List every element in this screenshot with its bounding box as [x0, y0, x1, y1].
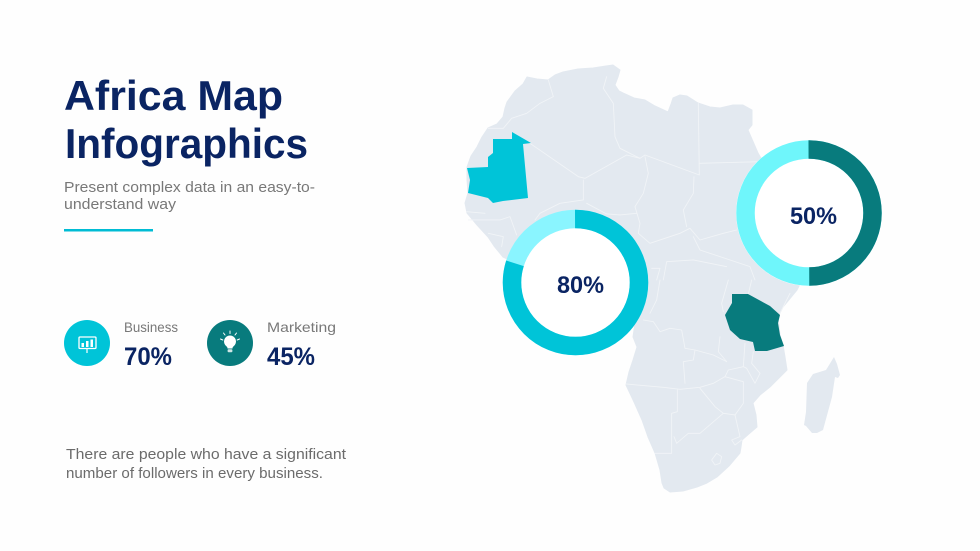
- body text: There are people who have a significant: [66, 446, 347, 463]
- label: marketing: Marketing: [267, 319, 336, 335]
- map: madagascar: [804, 357, 840, 433]
- value: 45%: 45%: [267, 343, 315, 371]
- icon: light bulb: [207, 320, 253, 366]
- africa map: [465, 65, 850, 492]
- subtitle: Present complex data in an easy-to-: [64, 179, 315, 196]
- value: 70%: 70%: [124, 343, 172, 371]
- map: continent outline: [465, 65, 850, 492]
- value: 50%: 50%: [790, 203, 837, 230]
- body text: [66, 446, 347, 482]
- subtitle: understand way: [64, 196, 177, 213]
- map: mauritania highlight: [467, 132, 531, 203]
- icon: presentation board: [64, 320, 110, 366]
- title: Infographics: [65, 120, 308, 167]
- subtitle: [64, 179, 315, 213]
- value: 80%: 80%: [557, 272, 604, 299]
- stat: business: [64, 319, 178, 371]
- stat: marketing: [207, 319, 336, 371]
- accent underline: [64, 229, 153, 232]
- body text: number of followers in every business.: [66, 465, 323, 482]
- title: Africa Map: [64, 72, 283, 119]
- label: business: Business: [124, 319, 178, 335]
- map: northern borders: [467, 77, 760, 280]
- donut chart: 50%: [736, 140, 882, 286]
- title: [64, 72, 308, 167]
- map: tanzania highlight: [725, 294, 784, 351]
- map: southern borders: [626, 280, 790, 465]
- donut chart: 80%: [503, 210, 648, 355]
